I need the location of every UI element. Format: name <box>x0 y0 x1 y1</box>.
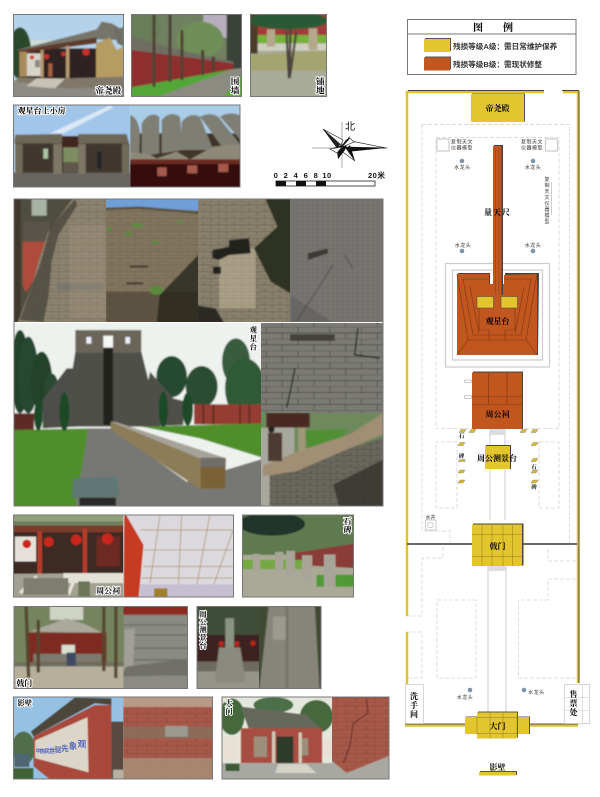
scale bar: 8 <box>314 171 318 180</box>
building: 洗手间 <box>406 684 424 724</box>
label: 台 <box>250 342 258 351</box>
faucets: 水龙头 <box>455 242 471 249</box>
photo: broken coping <box>258 410 386 509</box>
building: 帝尧殿 <box>471 94 525 122</box>
legend title: 图 <box>473 22 483 34</box>
wall inscription <box>36 739 87 755</box>
legend text: B: 残损等级B级：需现状修整 <box>453 59 542 69</box>
scale bar: 10 <box>322 171 332 180</box>
building: 售票处: 处 <box>570 707 578 717</box>
photo: 铺地 <box>247 11 329 100</box>
wall inscription: 族 <box>40 747 46 755</box>
terrace frames <box>446 264 550 367</box>
label: 地 <box>316 85 325 96</box>
feature: 周公测景台: 周公测景台 <box>477 453 518 463</box>
photo: 戟门 steps <box>14 603 191 692</box>
building: 售票处: 票 <box>570 698 578 708</box>
photo: wall 1 <box>11 196 109 325</box>
photo: 影壁 <box>10 694 126 782</box>
building: 帝尧殿: 帝尧殿 <box>486 103 510 113</box>
photo: cracks <box>258 320 386 416</box>
markers: replica instruments: 模 <box>544 212 550 219</box>
label: 石 <box>343 516 351 526</box>
feature: yellow rooms <box>477 296 518 308</box>
scale bar <box>274 170 385 186</box>
faucets: 水龙头 <box>525 242 541 249</box>
feature: 周公测景台 <box>477 445 518 469</box>
building: 周公祠 <box>472 372 523 429</box>
well <box>425 514 436 530</box>
legend swatch: B <box>424 56 451 70</box>
faucets: 水龙头 <box>528 689 545 696</box>
wall inscription: 世 <box>49 746 56 755</box>
label: 围 <box>231 77 240 87</box>
icon: compass <box>312 121 388 168</box>
photo: stele closeup <box>197 603 324 692</box>
markers: replica instruments <box>437 138 558 225</box>
photo: 影壁 bricks <box>14 694 215 782</box>
wall inscription: 先 <box>61 743 69 753</box>
building: 售票处: 售 <box>570 689 578 699</box>
label: 戟门 <box>16 678 32 688</box>
building: 大门: 大门 <box>490 721 506 731</box>
building: 观星台 <box>457 273 539 355</box>
wall inscription: 驱 <box>55 745 62 754</box>
photo: ceiling <box>14 512 236 600</box>
stelae markers <box>458 430 538 483</box>
scale bar: 6 <box>304 171 308 180</box>
small markers <box>464 380 472 398</box>
labels: stelae: 碑 <box>459 452 465 460</box>
faucets: 水龙头 <box>525 164 541 171</box>
photo: 戟门 <box>11 603 127 692</box>
wall inscription: 民 <box>44 748 50 755</box>
building: 洗手间: 手 <box>410 700 418 710</box>
legend title <box>473 21 513 34</box>
label: 门 <box>225 707 233 716</box>
label: 测 <box>199 626 207 634</box>
markers: replica instruments: 器 <box>544 207 550 213</box>
building: 售票处 <box>564 684 590 724</box>
legend swatch: A <box>424 38 451 52</box>
outer wall <box>405 90 579 726</box>
wall inscription: 中 <box>36 747 41 754</box>
label: 帝尧殿 <box>95 85 122 96</box>
label: 周公祠 <box>96 586 120 596</box>
markers: replica instruments: 复制天文 <box>521 138 543 146</box>
building: 周公祠: 周公祠 <box>486 409 510 419</box>
markers: replica instruments: 复制天文 <box>451 138 473 146</box>
markers: replica instruments: 天 <box>544 189 550 195</box>
legend <box>408 20 576 74</box>
label: 观 <box>250 326 258 335</box>
photo: wall 3 <box>195 196 293 325</box>
scale bar: 4 <box>294 171 299 180</box>
well: 水井 <box>425 514 436 521</box>
label: 量天尺: 量天尺 <box>484 207 511 217</box>
wall inscription: 象 <box>69 741 78 751</box>
legend title: 例 <box>503 21 513 34</box>
label: north: 北 <box>345 121 355 133</box>
faucets: 水龙头 <box>454 164 471 171</box>
photo: 帝尧殿 <box>9 11 127 100</box>
photo: 大门 <box>219 694 335 782</box>
legend text: A: 残损等级A级：需日常维护保养 <box>453 41 558 51</box>
labels: stelae: 石 <box>531 463 537 471</box>
markers: replica instruments: 制 <box>544 182 550 189</box>
markers: replica instruments: 文 <box>544 194 550 201</box>
building: 大门 <box>465 712 530 738</box>
labels: stelae: 石 <box>459 432 465 440</box>
label: 观星台上小房 <box>18 106 66 116</box>
label: 景 <box>199 633 207 642</box>
photo: 周公祠 <box>10 512 126 600</box>
feature: 量天尺 strip <box>493 145 503 296</box>
paths <box>488 429 506 712</box>
markers: replica instruments: 型 <box>544 218 550 225</box>
label: 公 <box>199 618 207 627</box>
photo group: brick wall damage <box>11 196 386 509</box>
label: 台 <box>199 641 207 650</box>
labels: stelae: 碑 <box>531 483 537 491</box>
photo: 石碑 <box>239 512 356 600</box>
site plan <box>405 90 590 776</box>
label: 星 <box>250 334 258 343</box>
building: 洗手间: 洗 <box>410 691 418 701</box>
photo: wall 4 <box>287 196 386 325</box>
photo: 围墙 <box>127 8 245 100</box>
label: 铺 <box>316 76 325 87</box>
label: 影壁 <box>18 698 33 707</box>
photo: 周公测景台 <box>194 603 262 692</box>
label: 碑 <box>343 525 351 535</box>
labels: stelae <box>459 432 537 491</box>
wall inscription: 观 <box>78 739 87 749</box>
scale bar: 0 <box>274 171 278 180</box>
photo: 大门 wall crack <box>222 694 392 782</box>
label: 周 <box>199 610 207 619</box>
faucets: 水龙头 <box>457 694 473 701</box>
building: 影壁: 影壁 <box>490 762 506 772</box>
markers: replica instruments: 仪器模型 <box>521 144 543 152</box>
scale bar: 2 <box>284 171 288 180</box>
photo: 观星台上小房 <box>10 101 134 190</box>
photo: wall 2 <box>103 196 201 325</box>
label: 大 <box>225 698 233 707</box>
building: 洗手间: 间 <box>410 709 418 719</box>
label: 墙 <box>231 85 240 96</box>
photo: 观星台 main view <box>11 320 265 509</box>
building: 观星台: 观星台 <box>486 316 510 326</box>
building: 戟门 <box>472 524 524 566</box>
photo: 屋瓦细部 <box>14 101 244 190</box>
scale bar: 20米 <box>368 170 385 180</box>
markers: replica instruments: 复 <box>544 176 550 183</box>
markers: replica instruments: 仪器模型 <box>451 144 473 152</box>
building: 影壁 <box>479 762 517 776</box>
markers: replica instruments: 仪 <box>544 201 550 207</box>
building: 戟门: 戟门 <box>490 541 506 551</box>
faucets <box>454 159 545 701</box>
dashed layout <box>406 124 576 678</box>
